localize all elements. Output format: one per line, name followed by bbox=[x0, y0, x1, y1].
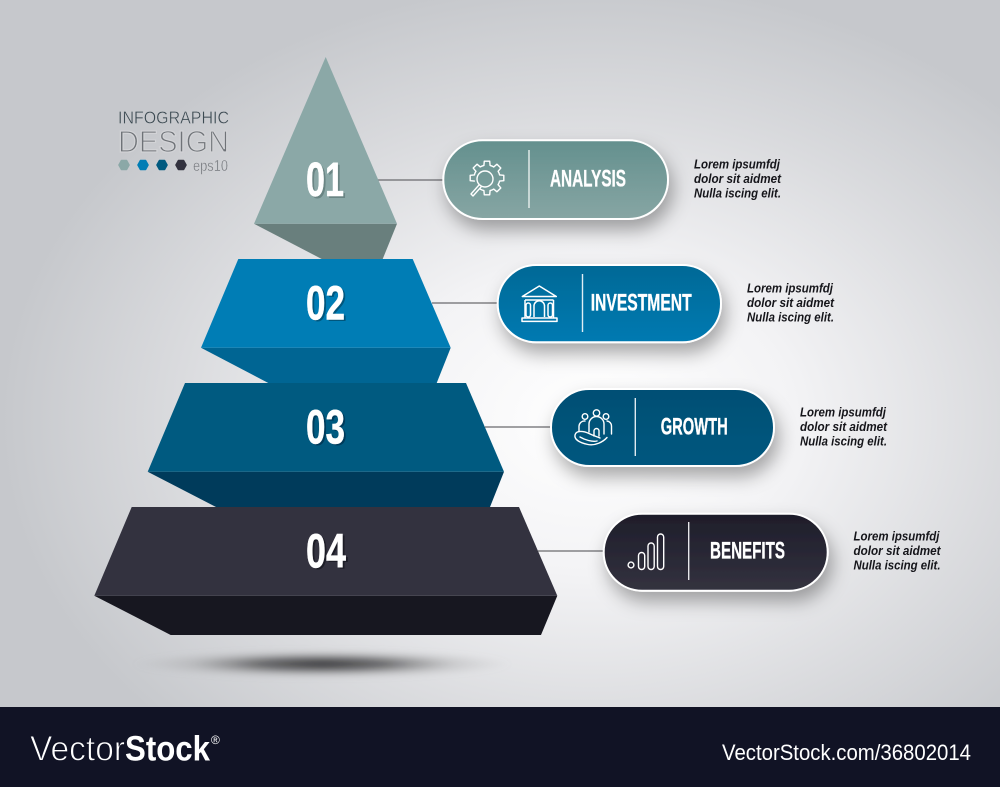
text block: analysis description: Nulla iscing elit. bbox=[694, 186, 781, 200]
logo: VectorStock: Stock bbox=[125, 730, 210, 769]
number 01: 01 bbox=[308, 156, 346, 209]
number 02: 02 bbox=[308, 279, 347, 332]
connector lines bbox=[378, 180, 603, 551]
text block: analysis description bbox=[694, 157, 782, 200]
brand block: infographic design bbox=[118, 107, 229, 175]
text block: benefits description: dolor sit aidmet bbox=[854, 544, 941, 558]
pyramid tier 01 bbox=[254, 57, 397, 259]
text block: investment description: Nulla iscing elit. bbox=[747, 310, 834, 324]
label: analysis: ANALYSIS bbox=[550, 166, 626, 193]
number 03: 03 bbox=[306, 401, 345, 454]
number 04: 04 bbox=[306, 525, 346, 578]
text block: investment description: dolor sit aidmet bbox=[747, 296, 835, 310]
text block: analysis description: Lorem ipsumfdj bbox=[694, 157, 780, 171]
text block: benefits description: Nulla iscing elit. bbox=[854, 558, 940, 572]
label: growth: GROWTH bbox=[661, 413, 728, 440]
logo: VectorStock bbox=[30, 730, 220, 769]
icon: signal bars bbox=[628, 534, 664, 570]
pill: analysis bbox=[443, 140, 668, 219]
heading: INFOGRAPHIC: INFOGRAPHIC bbox=[118, 107, 229, 127]
icon: bank bbox=[522, 286, 557, 321]
text block: growth description: dolor sit aidmet bbox=[800, 420, 888, 434]
colour hexagons bbox=[119, 160, 186, 170]
pyramid tier 04 bbox=[94, 507, 557, 635]
pyramid tier 03 bbox=[148, 383, 504, 507]
footer bar bbox=[0, 707, 1000, 787]
label: eps10: eps10 bbox=[193, 158, 228, 175]
text block: analysis description: dolor sit aidmet bbox=[694, 172, 782, 186]
number 01: 01 bbox=[306, 154, 344, 207]
logo: VectorStock: ® bbox=[211, 733, 220, 747]
number 04: 04 bbox=[308, 527, 348, 580]
logo: VectorStock: Vector bbox=[30, 730, 125, 769]
number 02: 02 bbox=[306, 277, 345, 330]
pyramid tier 02 bbox=[201, 259, 451, 383]
pill: investment bbox=[498, 265, 721, 342]
text block: investment description bbox=[747, 281, 835, 324]
pill: growth bbox=[551, 389, 774, 466]
text block: growth description bbox=[800, 405, 888, 448]
icon: gear with magnifier bbox=[470, 161, 504, 196]
footer url: VectorStock.com/36802014 bbox=[722, 740, 971, 765]
pill: benefits bbox=[604, 514, 828, 591]
text block: benefits description bbox=[854, 529, 941, 572]
text block: benefits description: Lorem ipsumfdj bbox=[854, 529, 940, 543]
label: investment: INVESTMENT bbox=[591, 290, 692, 317]
floor shadow bbox=[132, 649, 512, 679]
text block: growth description: Lorem ipsumfdj bbox=[800, 405, 886, 419]
text block: growth description: Nulla iscing elit. bbox=[800, 434, 887, 448]
number 03: 03 bbox=[308, 403, 347, 456]
text block: investment description: Lorem ipsumfdj bbox=[747, 281, 833, 295]
heading: DESIGN: DESIGN bbox=[118, 125, 229, 159]
label: benefits: BENEFITS bbox=[710, 537, 785, 564]
icon: people in hand bbox=[575, 410, 612, 445]
